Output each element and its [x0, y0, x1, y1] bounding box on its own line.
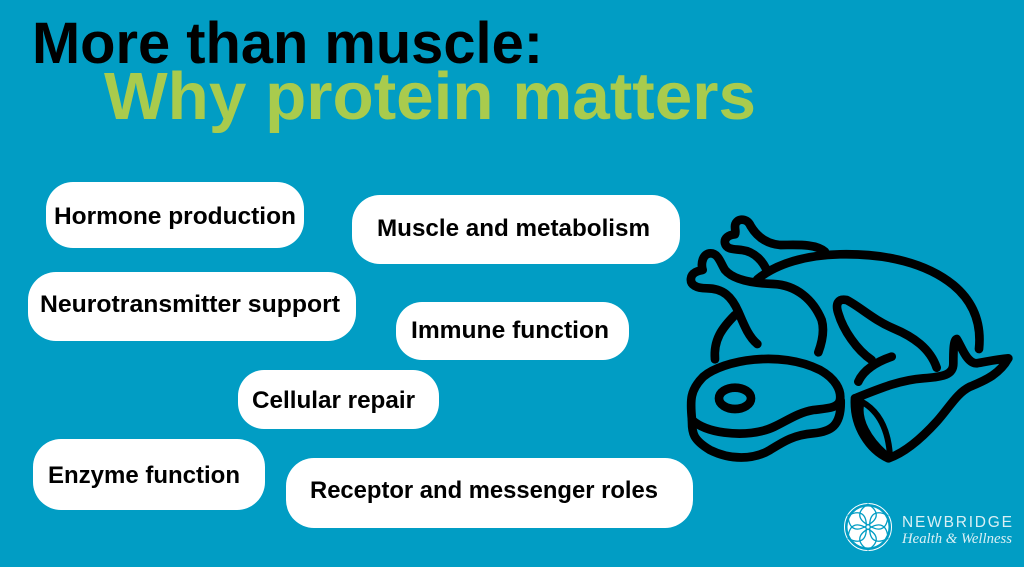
pill: hormone production: [46, 182, 304, 248]
logo: Newbridge Health & Wellness: [844, 504, 1012, 550]
pill: cellular repair: [238, 370, 439, 429]
title: why protein matters: Why protein matters: [104, 59, 756, 134]
logo wordmark: NEWBRIDGE: [902, 514, 1012, 531]
pill: neurotransmitter support: Neurotransmitter support: [40, 291, 340, 318]
pill: muscle and metabolism: Muscle and metabolism: [377, 215, 650, 242]
logo mark: flower: [844, 504, 892, 550]
pill: enzyme function: Enzyme function: [48, 462, 240, 489]
title: more than muscle: More than muscle:: [32, 11, 543, 76]
icon: chicken, steak and fish: [691, 220, 1008, 458]
pill: hormone production: Hormone production: [54, 203, 296, 230]
logo tagline: Health & Wellness: [901, 531, 1012, 547]
pill: neurotransmitter support: [28, 272, 356, 341]
pill: muscle and metabolism: [352, 195, 680, 264]
pill: receptor and messenger roles: [286, 458, 693, 528]
pill: cellular repair: Cellular repair: [252, 387, 415, 414]
pill: immune function: [396, 302, 629, 360]
pill: enzyme function: [33, 439, 265, 510]
pill: receptor and messenger roles: Receptor and messenger roles: [310, 477, 658, 504]
pill: immune function: Immune function: [411, 317, 609, 344]
